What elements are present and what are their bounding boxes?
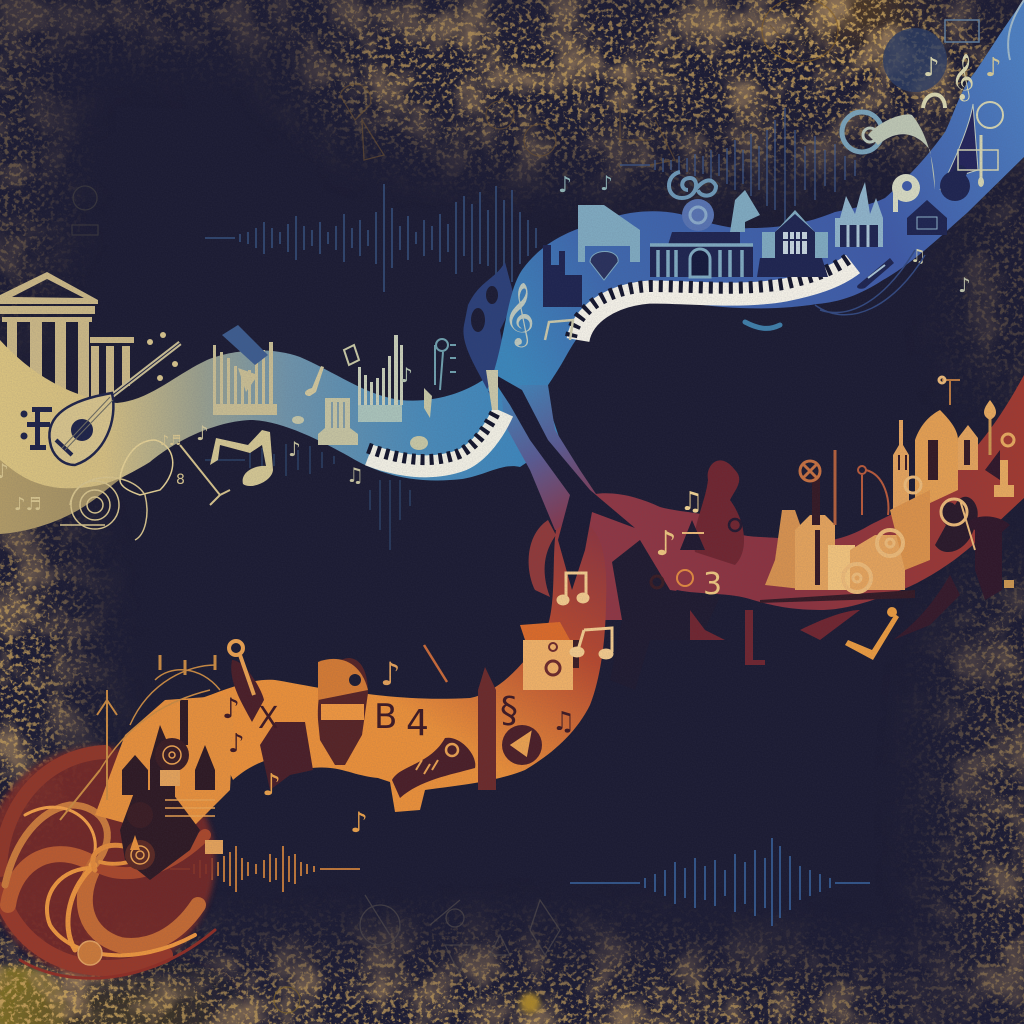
musical notes on cream ribbon: ♪ — [196, 421, 209, 445]
orange notes and glyphs: ♪ — [262, 768, 281, 803]
temple — [0, 272, 134, 402]
treble clef and notes blue: ♪ — [600, 171, 613, 195]
city skyline red right — [765, 410, 978, 590]
building on ribbon — [318, 398, 358, 445]
waveform: upper left blue — [205, 184, 536, 292]
icon: projector near ribbon — [435, 339, 456, 390]
lute — [49, 332, 180, 465]
musical notes on cream ribbon — [196, 345, 432, 487]
orange notes and glyphs: B — [374, 697, 397, 737]
orange notes and glyphs: ♪ — [380, 655, 400, 693]
orange ribbon objects — [231, 658, 542, 798]
ribbon: cream to blue flowing right — [0, 340, 560, 488]
top right ornaments — [745, 0, 1024, 328]
orange notes and glyphs: 4 — [406, 703, 429, 744]
top right ornaments: ♪ — [958, 273, 971, 297]
limb: left maroon drip — [529, 520, 556, 597]
musical notes on cream ribbon: ♪ — [288, 437, 301, 461]
ornaments cream swirl: 8 — [176, 472, 185, 488]
city skyline orange left — [95, 695, 235, 880]
orange notes and glyphs: ♪ — [228, 729, 245, 759]
treble clef and notes blue — [486, 171, 613, 410]
notes red: ♫ — [680, 487, 703, 517]
ornaments cream swirl — [0, 433, 230, 540]
organ pipes left — [213, 325, 277, 415]
dark cracks at crossing — [487, 370, 635, 590]
maroon fragments — [690, 460, 860, 665]
spiral vortex — [0, 747, 215, 978]
orange notes and glyphs: ♪ — [222, 692, 240, 725]
orange ribbon small lights — [229, 641, 530, 774]
lower keyboard — [368, 409, 503, 466]
buildings skyline blue — [543, 182, 947, 307]
top right ornaments: 𝄞 — [951, 54, 975, 102]
faint bottom doodles — [274, 895, 560, 1013]
dark detail in city — [760, 440, 1010, 640]
waveform: upper right blue — [620, 108, 855, 224]
blue drips near branch — [463, 262, 515, 395]
waveform: bottom orange — [170, 846, 360, 892]
musical notes on cream ribbon: ♫ — [346, 463, 364, 487]
icons right of ribbon — [845, 400, 1014, 660]
orange notes and glyphs — [222, 655, 575, 839]
ribbon: branch crossing — [500, 385, 600, 530]
ribbon: dark red flowing right — [570, 375, 1024, 620]
top-left treble scroll — [669, 172, 716, 198]
organ pipes middle — [358, 335, 403, 422]
ribbon: orange flowing to lower left — [196, 521, 606, 812]
ornaments cream swirl: ♪♬ — [14, 494, 42, 515]
waveform: bottom blue — [570, 838, 870, 926]
orange notes and glyphs: X — [258, 701, 279, 736]
icon: antenna and arcs — [60, 655, 220, 820]
orange notes and glyphs: ♪ — [350, 806, 368, 839]
top right ornaments: ♫ — [910, 246, 926, 267]
ribbon: blue flowing to upper right — [487, 0, 1024, 420]
ribbon: tan lower band left — [0, 420, 200, 534]
ornaments cream swirl: ♪♬ — [160, 433, 182, 449]
notes red — [651, 487, 741, 602]
clock tower — [520, 622, 579, 690]
orange notes and glyphs: ♫ — [552, 707, 575, 737]
notes red: ♪ — [655, 524, 677, 564]
note: beamed notes on orange-red — [558, 573, 612, 658]
notes red: 3 — [703, 567, 722, 602]
top right ornaments: ♪ — [985, 53, 1002, 83]
upper keyboard — [571, 258, 853, 340]
musical notes on cream ribbon: ♪ — [400, 363, 413, 387]
orange notes and glyphs: § — [500, 690, 518, 731]
dark root shadows — [610, 540, 720, 690]
faint background doodles — [72, 0, 890, 235]
top right ornaments: ♪ — [923, 53, 940, 83]
treble clef and notes blue: ♪ — [558, 173, 572, 198]
waveform: left middle dim — [205, 444, 410, 550]
dark circle behind top right notes — [883, 28, 947, 92]
icon: orb — [78, 941, 102, 965]
treble clef and notes blue: 𝄞 — [503, 282, 535, 348]
icon: F clef — [20, 407, 52, 450]
gears red — [800, 377, 990, 592]
